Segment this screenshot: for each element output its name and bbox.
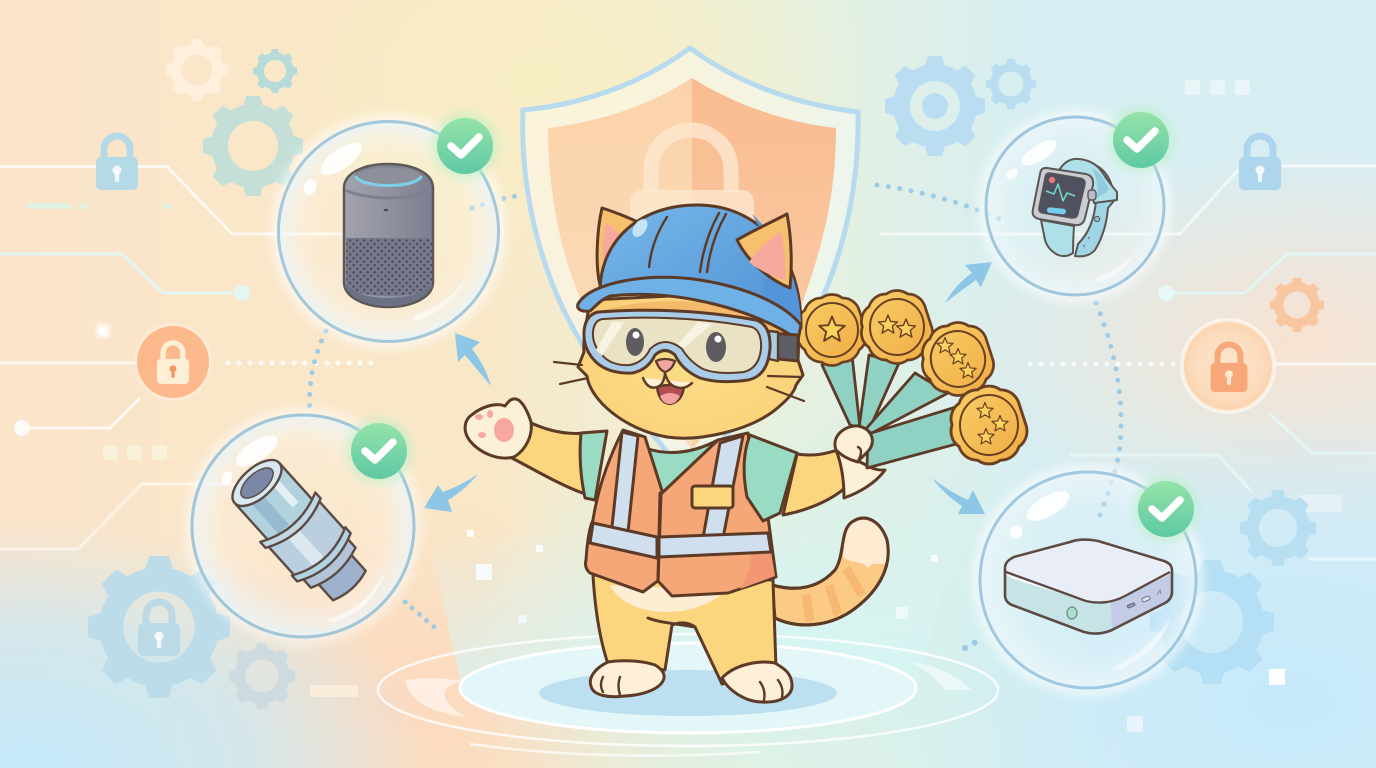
circuit lines bbox=[0, 166, 1376, 559]
medal two stars bbox=[861, 290, 933, 364]
medal one star bbox=[797, 295, 867, 365]
light beam bbox=[430, 520, 962, 690]
cat character bbox=[465, 205, 1027, 702]
cat left arm and paw bbox=[465, 399, 607, 500]
cat tail bbox=[772, 518, 888, 625]
lock: right blue bbox=[1239, 136, 1281, 190]
platform bbox=[378, 634, 998, 756]
safety goggles bbox=[584, 310, 798, 382]
bubble: smart watch bbox=[984, 115, 1166, 297]
gear: behind hub bubble bbox=[1150, 560, 1274, 684]
check badge: speaker bbox=[432, 113, 498, 179]
forehead band bbox=[596, 301, 796, 345]
medal four stars bbox=[951, 386, 1027, 464]
cat head bbox=[578, 290, 803, 438]
lock: left blue bbox=[96, 136, 138, 190]
certificate strips bbox=[822, 355, 960, 468]
gear: top left pale bbox=[166, 39, 228, 101]
lock badge: left orange bbox=[134, 323, 212, 401]
gear: right orange bbox=[1270, 278, 1324, 332]
cat legs and feet bbox=[590, 575, 792, 702]
medal three stars bbox=[922, 322, 994, 396]
check badge: valve bbox=[346, 418, 412, 484]
platform shadow bbox=[539, 670, 837, 716]
cat right hand fingers bbox=[835, 426, 872, 462]
cat eyes bbox=[626, 328, 726, 362]
check badge: hub bbox=[1133, 476, 1199, 542]
bubble: valve bbox=[190, 413, 416, 639]
certificate fan bbox=[797, 290, 1027, 468]
shield bbox=[523, 48, 858, 480]
bubble: smart hub bbox=[978, 470, 1198, 690]
arrows bbox=[424, 262, 992, 514]
bubble: smart speaker bbox=[276, 120, 500, 344]
right sleeve bbox=[744, 435, 797, 521]
icon: smart watch bbox=[1033, 159, 1117, 256]
gear: top left small bbox=[253, 49, 297, 93]
gear: top right small bbox=[986, 59, 1036, 109]
dotted connectors bbox=[228, 185, 1176, 648]
gear: bottom left with lock bbox=[88, 556, 230, 698]
cat vest bbox=[586, 430, 776, 596]
hard hat bbox=[578, 205, 801, 340]
gear: top right large bbox=[885, 56, 985, 156]
cat ear right bbox=[737, 214, 791, 288]
gear: bottom left small bbox=[229, 643, 295, 709]
cat right hand base bbox=[836, 450, 885, 498]
icon: valve bbox=[219, 447, 380, 613]
icon: smart speaker bbox=[344, 164, 433, 307]
cat ear left bbox=[597, 208, 650, 285]
vest badge bbox=[692, 486, 733, 508]
gear: top left large bbox=[203, 96, 303, 196]
check badge: watch bbox=[1108, 107, 1174, 173]
cat whiskers bbox=[554, 362, 804, 401]
icon: smart hub bbox=[1005, 539, 1172, 634]
cat nose and mouth bbox=[643, 359, 692, 404]
lock badge: right orange bbox=[1182, 320, 1274, 412]
gear: lower right small bbox=[1240, 490, 1316, 566]
cat right arm bbox=[783, 450, 852, 515]
